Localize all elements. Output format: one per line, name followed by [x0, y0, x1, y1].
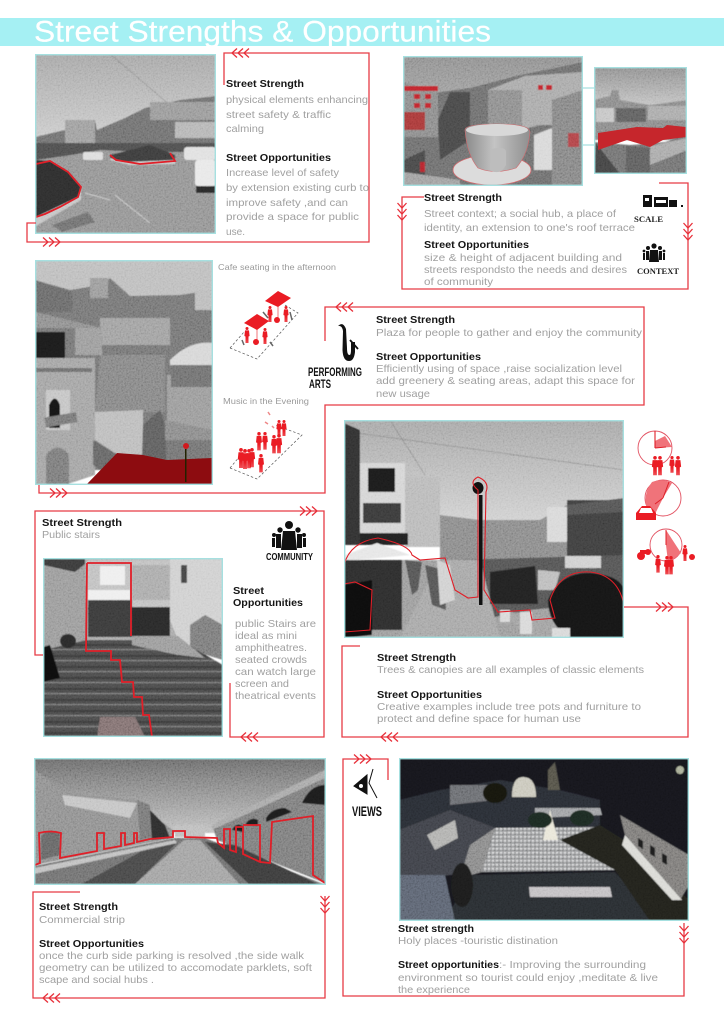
- text: stairs opportunities: can watch large: [235, 666, 316, 678]
- text: strength and opportunities: Street Opportunities: [226, 152, 331, 164]
- connector frame: panel 2: [398, 183, 692, 289]
- text: strength and opportunities: provide a space for public: [226, 211, 359, 223]
- label: scale: SCALE: [634, 214, 663, 224]
- text: strength and opportunities: Street Strength: [226, 78, 304, 90]
- text: public stairs heading: Public stairs: [42, 529, 100, 541]
- text: strength and opportunities: street safety & traffic: [226, 109, 331, 121]
- icon: cafe seating axonometric: [230, 291, 298, 359]
- text: social hub: Street context; a social hub, a place of: [424, 208, 616, 220]
- text: holy places: the experience: [398, 984, 470, 996]
- panel: roof terrace: [398, 56, 692, 289]
- text: holy places: Street opportunities: [398, 959, 499, 971]
- text: trees and canopies: Street Strength: [377, 652, 456, 664]
- label: community: COMMUNITY: [266, 551, 313, 563]
- icon: clock with car: [636, 480, 681, 520]
- icon: community people: [272, 521, 306, 550]
- panel: street furniture: [342, 420, 695, 742]
- text: stairs opportunities: seated crowds: [235, 654, 307, 666]
- photo: rooftops with coffee cup: [403, 56, 583, 186]
- text: strength and opportunities: calming: [226, 123, 264, 135]
- text: holy places: environment so tourist could enjoy ,meditate & live: [398, 972, 658, 984]
- text: holy places: Holy places -touristic distination: [398, 935, 558, 947]
- text: strength and opportunities: Increase level of safety: [226, 167, 340, 179]
- text: strength and opportunities: physical elements enhancing: [226, 94, 368, 106]
- label: context: CONTEXT: [637, 266, 679, 276]
- text: public stairs heading: [42, 517, 122, 541]
- text: public stairs heading: Street Strength: [42, 517, 122, 529]
- text: holy places: [398, 923, 658, 996]
- photo: red roof terrace: [594, 67, 687, 174]
- text: plaza: add greenery & seating areas, adapt this space for: [376, 375, 636, 387]
- text: stairs opportunities: [233, 585, 316, 702]
- text: trees and canopies: Street Opportunities: [377, 689, 482, 701]
- text: commercial strip: geometry can be utilized to accomodate parklets, soft: [39, 962, 312, 974]
- photo: old town plaza with red floor: [35, 260, 213, 485]
- text: plaza: Street Opportunities: [376, 351, 481, 363]
- text: commercial strip: [39, 901, 312, 986]
- text: social hub: size & height of adjacent building and: [424, 252, 622, 264]
- text: stairs opportunities: public Stairs are: [235, 618, 316, 630]
- title band: [0, 16, 724, 48]
- photo: public stairs: [43, 558, 223, 737]
- text: social hub: [424, 192, 635, 288]
- text: social hub: identity, an extension to one's roof terrace: [424, 222, 635, 234]
- text: commercial strip: Street Opportunities: [39, 938, 144, 950]
- label: performing arts: PERFORMING: [308, 367, 362, 379]
- text: stairs opportunities: ideal as mini: [235, 630, 297, 642]
- text: stairs opportunities: theatrical events: [235, 690, 316, 702]
- text: plaza: new usage: [376, 388, 430, 400]
- connector frame: panel 7: [343, 754, 688, 996]
- text: trees and canopies: protect and define space for human use: [377, 713, 581, 725]
- text: plaza: Street Strength: [376, 314, 455, 326]
- connector frame: panel 3: [39, 302, 644, 498]
- text: social hub: of community: [424, 276, 494, 288]
- icon: scale buildings: [643, 195, 683, 207]
- text: trees and canopies: Creative examples include tree pots and furniture to: [377, 701, 641, 713]
- connector lines between photos: [583, 88, 594, 145]
- photo: sidewalk with canopies and lamp: [344, 420, 624, 638]
- text: social hub: Street Strength: [424, 192, 502, 204]
- icon: context people: [643, 243, 665, 262]
- icon: saxophone: [338, 324, 358, 361]
- text: plaza: [376, 314, 643, 400]
- text: social hub: streets respondsto the needs and desires: [424, 264, 627, 276]
- text: social hub: Street Opportunities: [424, 239, 529, 251]
- photo: street with curb extensions: [35, 54, 216, 234]
- icon: eye views: [354, 769, 377, 798]
- text: strength and opportunities: use.: [226, 226, 245, 238]
- title: Street Strengths & Opportunities: [34, 16, 491, 48]
- text: commercial strip: scape and social hubs .: [39, 974, 154, 986]
- label: performing arts: ARTS: [309, 379, 331, 391]
- text: commercial strip: Commercial strip: [39, 914, 125, 926]
- text: stairs opportunities: amphitheatres.: [235, 642, 307, 654]
- photo: aerial of manger square at night: [399, 758, 689, 921]
- icon: music axonometric: [230, 412, 302, 479]
- text: holy places: Street strength: [398, 923, 474, 935]
- panel: performing arts plaza: [35, 260, 644, 498]
- text: stairs opportunities: Street: [233, 585, 265, 597]
- text: stairs opportunities: Opportunities: [233, 597, 303, 609]
- panel: public stairs: [35, 506, 324, 742]
- connector frame: panel 1: [27, 48, 369, 246]
- icon: clock with family: [637, 529, 695, 574]
- text: plaza: Efficiently using of space ,raise socialization level: [376, 363, 622, 375]
- icon: clock with people: [638, 431, 681, 475]
- panel: commercial strip: [33, 758, 330, 1002]
- caption: music: Music in the Evening: [223, 396, 309, 406]
- label: performing arts: [308, 367, 362, 391]
- text: trees and canopies: [377, 652, 644, 725]
- text: trees and canopies: Trees & canopies are all examples of classic elements: [377, 664, 644, 676]
- panel: holy places views: [343, 754, 689, 996]
- photo: road with shop fronts: [34, 758, 326, 885]
- connector frame: panel 5: [342, 602, 688, 742]
- text: stairs opportunities: screen and: [235, 678, 289, 690]
- panel: traffic calming: [27, 48, 369, 246]
- connector frame: panel 6: [33, 892, 330, 1002]
- text: commercial strip: Street Strength: [39, 901, 118, 913]
- label: views: VIEWS: [352, 803, 382, 819]
- text: commercial strip: once the curb side parking is resolved ,the side walk: [39, 950, 305, 962]
- text: strength and opportunities: [226, 78, 369, 238]
- text: strength and opportunities: improve safety ,and can: [226, 197, 348, 209]
- connector frame: panel 4: [35, 506, 324, 742]
- text: plaza: Plaza for people to gather and enjoy the community: [376, 327, 643, 339]
- caption: cafe seating: Cafe seating in the afternoon: [218, 262, 336, 272]
- text: strength and opportunities: by extension existing curb to: [226, 182, 369, 194]
- text: holy places: :- Improving the surrounding: [499, 959, 646, 971]
